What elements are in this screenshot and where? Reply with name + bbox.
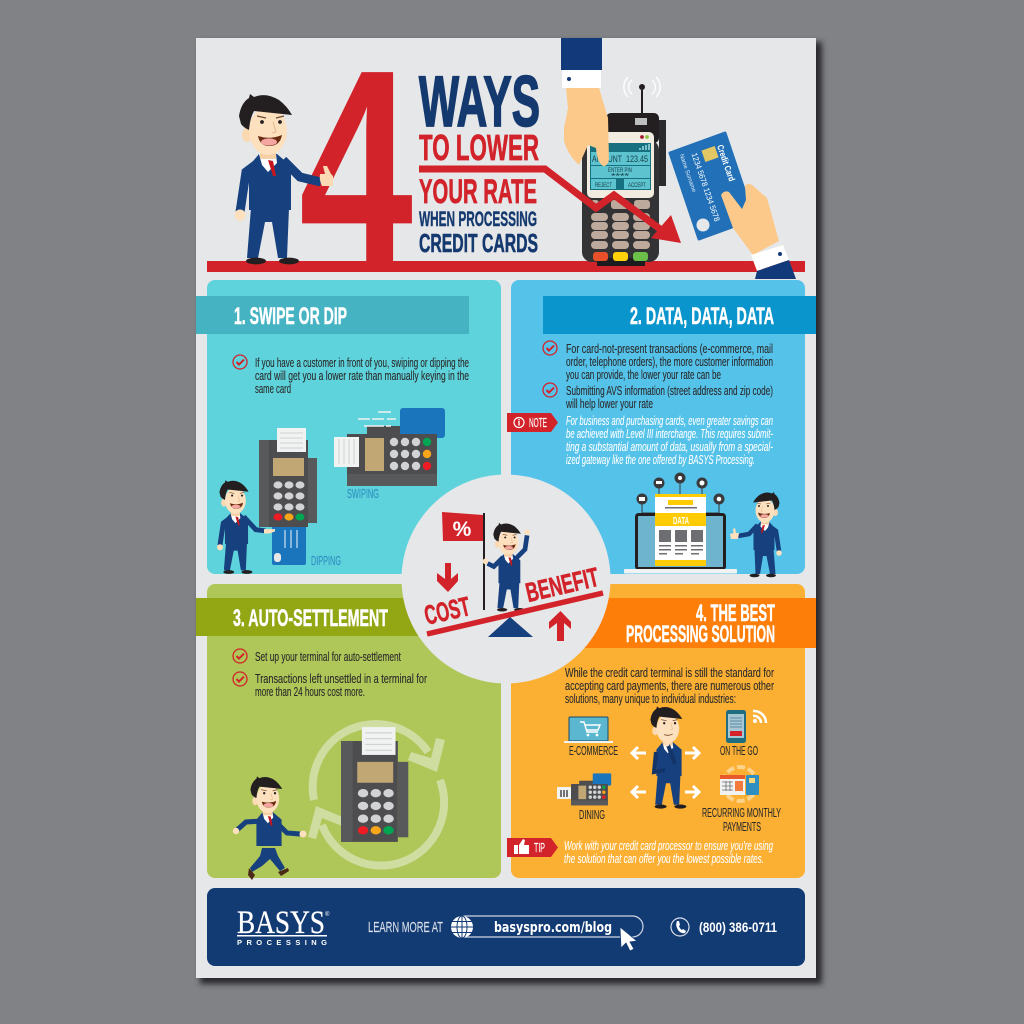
italic tip text: Work with your credit card processor to ensure you're using <box>564 839 773 853</box>
red downward trend arrow <box>419 169 681 243</box>
illustration: card terminal: **** <box>611 172 629 181</box>
illustration: swiping terminal: SWIPING <box>347 486 379 501</box>
illustration: terminal <box>341 727 408 842</box>
icon: circular refresh arrows <box>308 724 445 866</box>
panel: 2 data <box>507 280 816 577</box>
illustration: card terminal: REJECT <box>595 183 612 189</box>
option: dining <box>557 773 611 822</box>
learn more link <box>368 916 643 951</box>
label: cost: COST <box>421 591 473 631</box>
title: WHEN PROCESSING <box>419 208 537 231</box>
option: recurring monthly payments: RECURRING MONTHLY <box>702 806 781 820</box>
poster sheet <box>196 38 816 978</box>
banner: section 2: 2. DATA, DATA, DATA <box>630 303 774 330</box>
checklist text: section 2: will help lower your rate <box>565 397 653 411</box>
banner: section 3: 3. AUTO-SETTLEMENT <box>233 605 388 632</box>
icon: percent flag <box>442 512 485 610</box>
label: benefit: BENEFIT <box>523 562 602 608</box>
italic tip text <box>564 839 773 866</box>
title <box>419 63 540 258</box>
checklist text: section 2: Submitting AVS information (street address and zip code) <box>566 384 773 398</box>
banner: section 4 <box>570 598 816 648</box>
illustration: hand pressing keypad <box>561 38 609 166</box>
character: running man <box>233 776 306 880</box>
option: recurring monthly payments <box>702 767 781 834</box>
title: YOUR RATE <box>419 173 537 211</box>
character: thinking man <box>650 706 686 809</box>
tip tag: TIP <box>534 841 545 855</box>
italic note text: ting a substantial amount of data, usually from a special- <box>566 440 773 454</box>
illustration: card terminal <box>582 77 666 266</box>
poster shadow <box>200 42 822 984</box>
banner: section 4: 4. THE BEST <box>696 600 775 627</box>
intro text: section 4 <box>565 666 774 706</box>
illustration: dipping terminal and card: DIPPING <box>311 553 341 568</box>
panel: 3 auto-settlement <box>196 584 501 880</box>
title: WAYS <box>419 63 540 142</box>
checklist text: section 3: more than 24 hours cost more. <box>255 685 365 699</box>
italic note text: ized gateway like the one offered by BASYS Processing. <box>566 453 755 467</box>
italic note text: be achieved with Level III interchange. This requires submit- <box>566 427 773 441</box>
banner: section 1 <box>196 296 469 334</box>
checklist text: section 1: If you have a customer in front of you, swiping or dipping the <box>255 356 469 370</box>
illustration: hand holding credit card: Name Surname <box>678 153 697 194</box>
illustration: card terminal: ACCEPT <box>628 183 646 189</box>
checklist text: section 1: card will get you a lower rate than manually keying in the <box>255 369 469 383</box>
footer band <box>207 888 805 966</box>
checklist text: section 2 <box>543 341 773 411</box>
italic note text <box>566 414 773 467</box>
logo: BASYS Processing: PROCESSING <box>237 938 327 947</box>
character: man on seesaw with raised fist <box>483 523 530 611</box>
illustration: card terminal: 123.45 <box>626 154 648 164</box>
checklist text: section 2: order, telephone orders), the more customer information <box>566 355 773 369</box>
red ground line <box>207 261 805 272</box>
checklist text: section 3: Set up your terminal for auto-settlement <box>255 650 401 664</box>
option: dining: DINING <box>579 808 605 822</box>
panel: 4 best processing solution <box>507 584 816 878</box>
learn more link: LEARN MORE AT <box>368 919 443 936</box>
illustration: swiping terminal <box>334 408 445 501</box>
option: on the go: ON THE GO <box>720 744 758 758</box>
checklist text: section 2: you can provide, the lower your rate can be <box>566 368 721 382</box>
illustration: card terminal: ENTER PIN <box>608 168 632 174</box>
seesaw beam and fulcrum <box>427 593 603 637</box>
checklist text: section 3 <box>233 649 427 699</box>
checklist text: section 1: same card <box>255 382 291 396</box>
character: man gesturing at laptop <box>730 492 782 577</box>
title: TO LOWER <box>419 127 539 168</box>
italic note text: For business and purchasing cards, even greater savings can <box>566 414 773 428</box>
big numeral 4: 4 <box>299 13 414 321</box>
option: on the go <box>720 710 766 758</box>
logo: BASYS Processing: ® <box>325 911 330 918</box>
phone number: (800) 386-0711 <box>699 919 777 935</box>
title: CREDIT CARDS <box>419 228 538 258</box>
intro text: section 4: accepting card payments, there are numerous other <box>565 679 774 693</box>
banner: section 2 <box>543 296 816 334</box>
illustration: laptop with data sheet: DATA <box>673 516 689 527</box>
learn more link: basyspro.com/blog <box>494 920 612 936</box>
illustration: hand holding credit card: Credit Card <box>715 143 737 183</box>
italic tip text: the solution that can offer you the lowest possible rates. <box>564 852 764 866</box>
arrows from man to options <box>632 747 699 798</box>
phone number <box>671 918 777 936</box>
option: recurring monthly payments: PAYMENTS <box>723 820 761 834</box>
icon: down arrow <box>437 563 458 592</box>
note tag: NOTE <box>529 416 547 430</box>
checklist text: section 2: For card-not-present transactions (e-commerce, mail <box>566 342 773 356</box>
icon: percent flag: % <box>453 518 472 541</box>
illustration: laptop with data sheet <box>624 472 737 574</box>
checklist text: section 1 <box>233 355 469 396</box>
intro text: section 4: solutions, many unique to individual industries: <box>565 692 736 706</box>
tip tag <box>507 838 558 857</box>
character: man pointing at card <box>217 480 275 574</box>
intro text: section 4: While the credit card terminal is still the standard for <box>565 666 774 680</box>
character: man with thumbs up <box>234 94 333 264</box>
illustration: dipping terminal and card <box>259 428 341 568</box>
illustration: hand holding credit card: 1234 5678 1234 5678 <box>690 152 722 223</box>
illustration: hand holding credit card <box>670 133 796 279</box>
icon: up arrow <box>549 611 571 641</box>
illustration: card terminal: AMOUNT <box>592 154 622 164</box>
banner: section 4: PROCESSING SOLUTION <box>626 621 775 648</box>
option: e-commerce <box>564 717 618 758</box>
logo: BASYS Processing: BASYS <box>237 905 325 941</box>
central circle: cost vs benefit <box>402 474 610 684</box>
panel: 1 swipe or dip <box>196 280 501 574</box>
banner: section 1: 1. SWIPE OR DIP <box>234 303 347 330</box>
option: e-commerce: E-COMMERCE <box>569 744 618 758</box>
banner: section 3 <box>196 598 436 636</box>
checklist text: section 3: Transactions left unsettled in a terminal for <box>255 672 427 686</box>
note tag <box>507 413 558 432</box>
